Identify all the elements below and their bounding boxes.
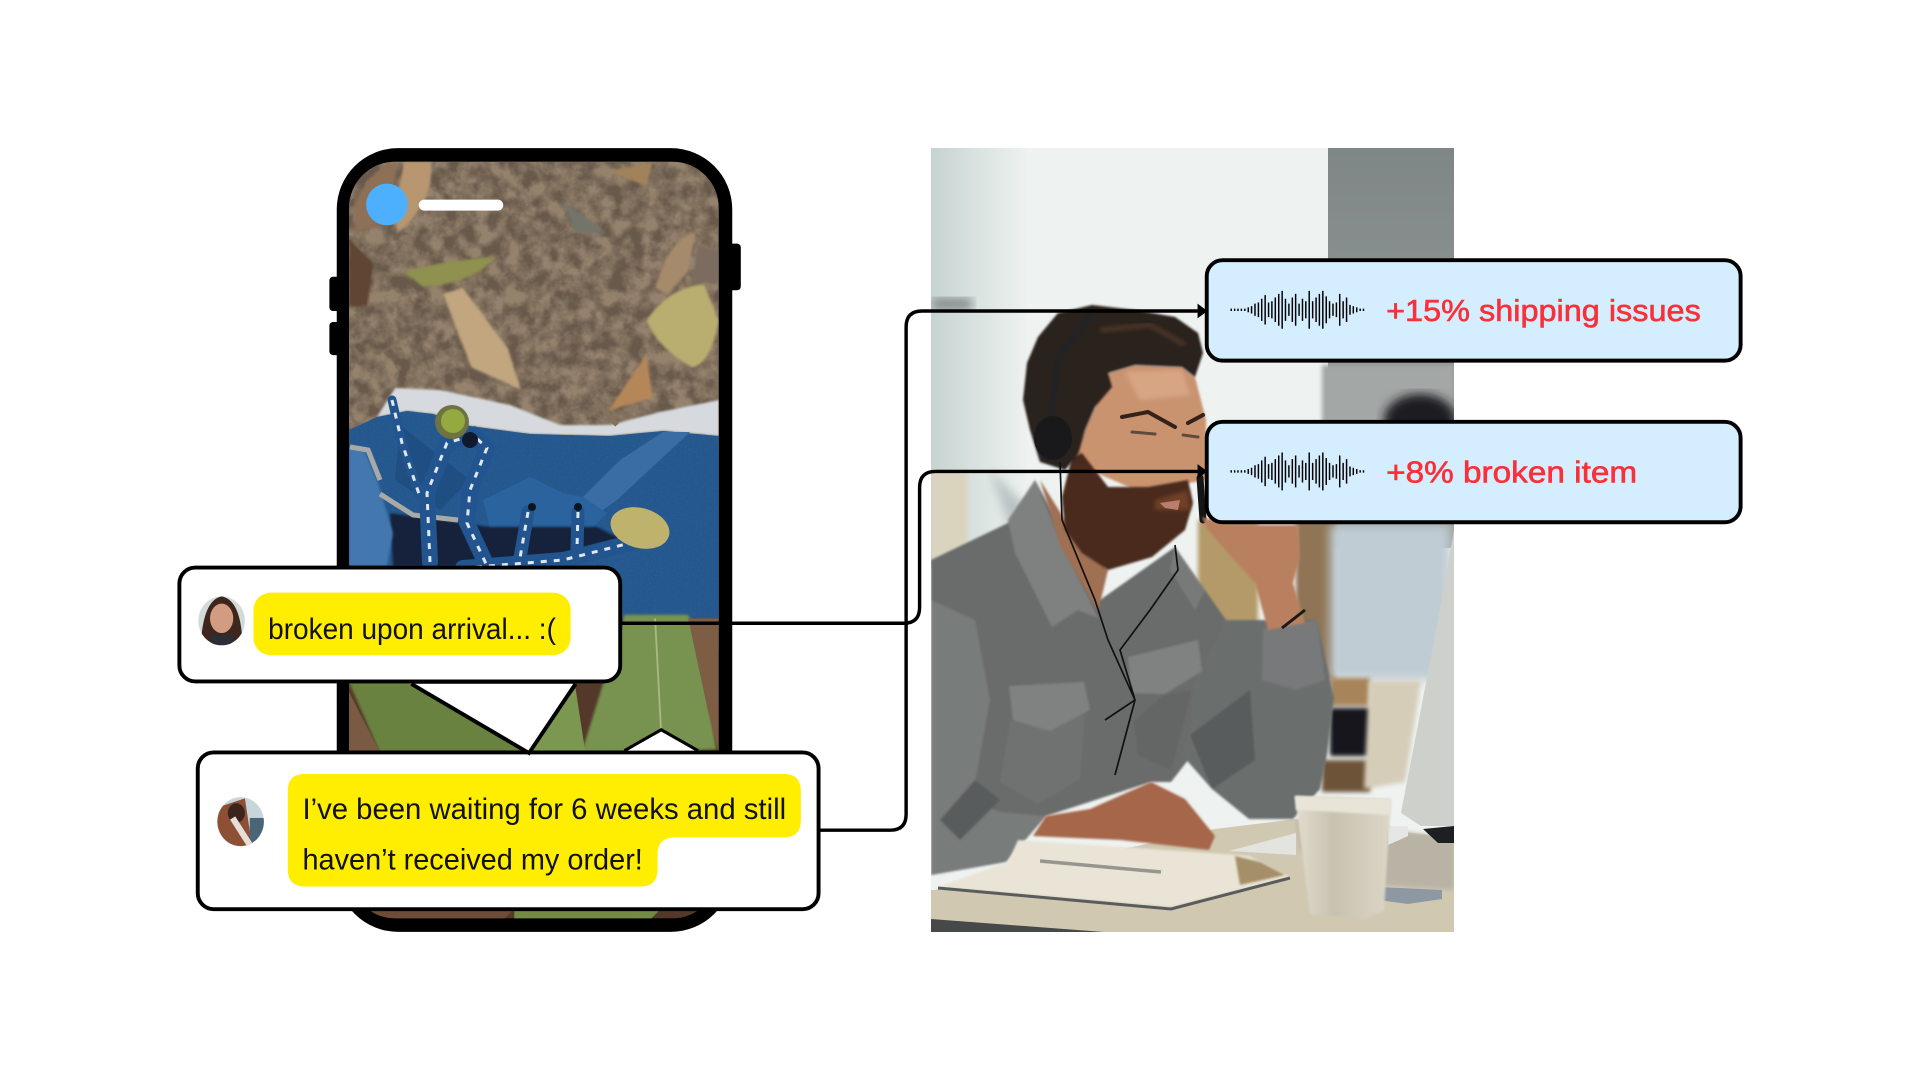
headset mic bbox=[1200, 478, 1203, 520]
profile name bar bbox=[419, 200, 503, 211]
beard bbox=[1062, 453, 1193, 570]
stat text: +15% shipping issues bbox=[1386, 294, 1701, 328]
message line two: haven’t received my order! bbox=[302, 843, 643, 876]
coffee cup bbox=[1295, 796, 1391, 919]
stick bbox=[593, 398, 617, 425]
chat card: broken upon arrival bbox=[179, 568, 620, 681]
headset wires bbox=[1060, 462, 1178, 775]
chat card: order not received bbox=[198, 752, 819, 909]
shirt bbox=[931, 480, 1334, 875]
sneaker laces bbox=[392, 400, 630, 568]
headset bbox=[1050, 313, 1092, 423]
phone mockup bbox=[329, 148, 741, 932]
notebook bbox=[938, 840, 1290, 907]
callout: shipping issues bbox=[1207, 260, 1741, 361]
sneaker upper bbox=[349, 411, 719, 620]
icon: sound wave bbox=[1231, 452, 1363, 490]
phone body bbox=[337, 148, 732, 932]
stat text: +8% broken item bbox=[1386, 455, 1637, 489]
phone screen photo: sneaker on dirt bbox=[349, 162, 721, 921]
avatar: woman bbox=[198, 596, 245, 646]
photo: support agent with headset bbox=[931, 148, 1456, 932]
sneaker photo detail bbox=[349, 388, 721, 625]
message bubble bbox=[288, 774, 801, 887]
message text: broken upon arrival... :( bbox=[268, 613, 556, 646]
office background bbox=[931, 148, 1454, 932]
phone on desk bbox=[1378, 887, 1442, 904]
speech tail: second chat card bbox=[624, 730, 698, 751]
icon: phone side buttons bbox=[329, 244, 741, 355]
sneaker sole bbox=[377, 388, 719, 436]
callout: broken item bbox=[1207, 422, 1741, 522]
desk bbox=[931, 819, 1454, 932]
burrs bbox=[435, 405, 469, 439]
arrow: broken item connector bbox=[621, 464, 1207, 623]
hand on mouse bbox=[1033, 782, 1215, 850]
leaves at the bottom bbox=[349, 618, 719, 918]
hand holding mic bbox=[1202, 517, 1305, 630]
keyboard bbox=[1229, 833, 1296, 855]
icon: profile dot bbox=[366, 184, 408, 225]
jeans hem bbox=[349, 447, 393, 566]
icon: sound wave bbox=[1231, 291, 1363, 329]
blurred coworker bbox=[1376, 388, 1454, 420]
message bubble bbox=[253, 593, 571, 655]
message line one: I’ve been waiting for 6 weeks and still bbox=[302, 793, 786, 826]
speech tail: first chat card bbox=[411, 684, 576, 753]
face bbox=[1075, 365, 1206, 492]
avatar: couple bbox=[217, 797, 264, 846]
eyes and brows bbox=[1122, 412, 1203, 437]
hair bbox=[1023, 305, 1203, 470]
arrow: shipping issues connector bbox=[820, 304, 1207, 830]
neck bbox=[1040, 480, 1108, 612]
